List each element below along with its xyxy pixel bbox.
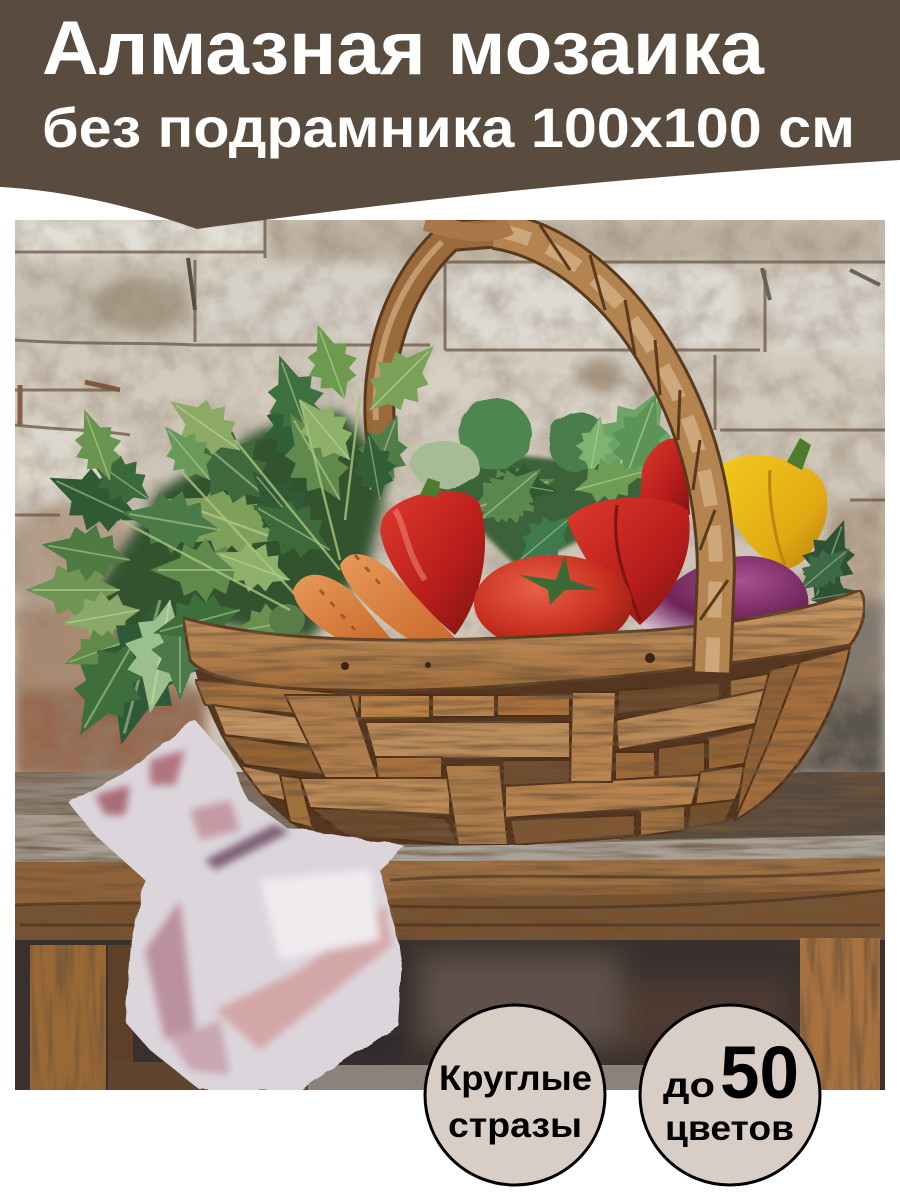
brick wall background: [0, 220, 885, 820]
tomato: [474, 555, 632, 637]
badge: up to 50 colours: до: [663, 1066, 715, 1105]
basket weave planks: [195, 648, 850, 845]
basket handle, back left: [376, 232, 500, 445]
leafy vegetables behind: [410, 394, 672, 563]
red pepper right: [567, 498, 690, 625]
yellow bell pepper: [722, 438, 828, 569]
red pepper front: [380, 478, 485, 635]
header banner: [0, 0, 900, 229]
small greens right: [802, 520, 855, 602]
wooden bench: [15, 770, 885, 1090]
carrots: [293, 554, 455, 640]
badge: up to 50 colours: цветов: [665, 1109, 794, 1148]
table leg left: [30, 945, 106, 1090]
badge: up to 50 colours: [640, 1005, 820, 1185]
kitchen towel: [68, 720, 405, 1090]
badge: up to 50 colours: 50: [720, 1031, 799, 1114]
watercolor picture panel: [0, 220, 885, 1090]
basket handle, front right: [425, 222, 728, 672]
basket rim: [183, 590, 865, 691]
red pepper back right: [640, 438, 690, 515]
title: Алмазная мозаика: [42, 6, 765, 91]
red cabbage: [642, 556, 808, 630]
greens bunch: [25, 316, 454, 757]
subtitle: без подрамника 100х100 см: [42, 96, 855, 159]
badge: round rhinestones: стразы: [448, 1106, 582, 1145]
table leg right: [800, 938, 880, 1090]
badge: round rhinestones: Круглые: [439, 1059, 592, 1098]
wicker basket: [183, 590, 865, 845]
badge: round rhinestones: [425, 1005, 605, 1185]
